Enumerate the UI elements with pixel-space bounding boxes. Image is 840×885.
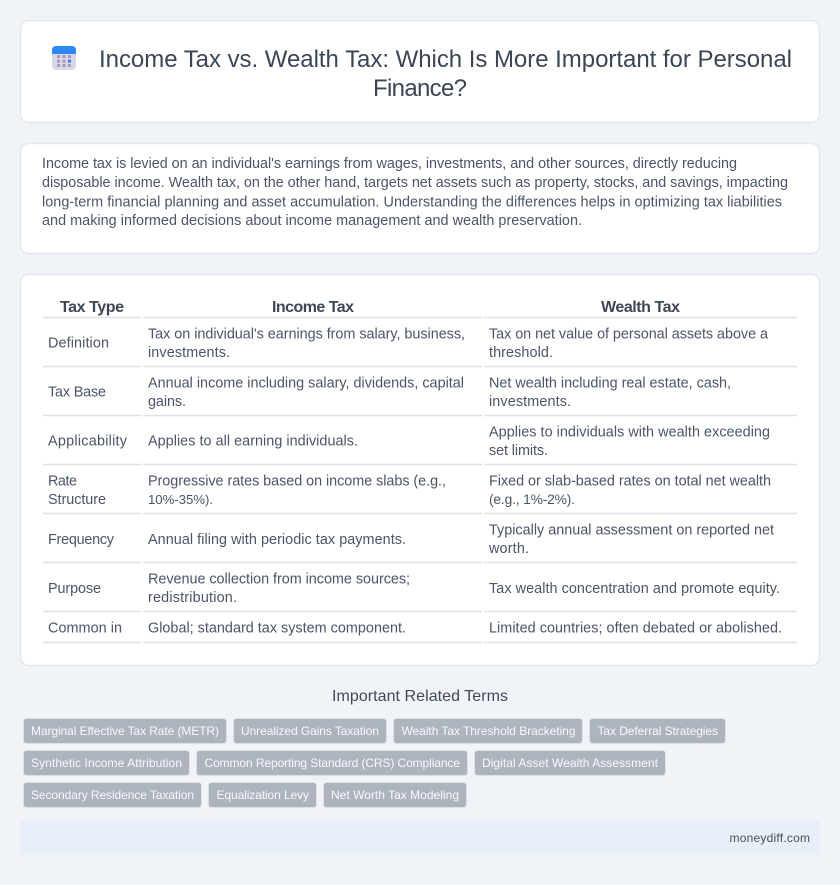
tag xyxy=(234,718,386,744)
title: Finance? xyxy=(373,75,467,102)
table row: purpose: redistribution. xyxy=(148,590,237,606)
table row: frequency: worth. xyxy=(488,541,529,557)
table row: applicability: Applies to individuals with wealth exceeding xyxy=(489,424,770,440)
tag: Synthetic Income Attribution xyxy=(31,756,182,770)
table row: rate structure: 10%-35%). xyxy=(148,492,213,507)
text block: description: long-term financial planning and asset accumulation. Understanding the differences helps in optimizing tax liabilities xyxy=(42,194,782,210)
text block: description: and making informed decisions about income management and wealth preservation. xyxy=(42,213,582,229)
tag xyxy=(24,782,202,808)
panel: comparison table card xyxy=(20,274,820,666)
tag xyxy=(24,750,190,776)
text block: description: disposable income. Wealth tax, on the other hand, targets net assets such as property, stocks, and savings, impacting xyxy=(42,175,788,191)
tag xyxy=(24,718,226,744)
tag: Marginal Effective Tax Rate (METR) xyxy=(31,724,219,738)
table row: definition: investments. xyxy=(148,345,230,361)
footer bar xyxy=(20,821,820,855)
title: Income Tax vs. Wealth Tax: Which Is More Important for Personal xyxy=(99,46,792,73)
tag xyxy=(196,750,468,776)
tag: Secondary Residence Taxation xyxy=(31,788,194,802)
table row: rate structure: Fixed or slab-based rates on total net wealth xyxy=(489,474,771,490)
panel: header card xyxy=(20,20,820,122)
title xyxy=(99,46,792,102)
tag: Unrealized Gains Taxation xyxy=(241,724,379,738)
table row: definition: threshold. xyxy=(489,345,553,361)
table row: common in: Limited countries; often debated or abolished. xyxy=(489,620,782,636)
table row: frequency xyxy=(43,522,797,562)
table row: definition: Tax on individual's earnings from salary, business, xyxy=(148,326,465,342)
table row: tax base: gains. xyxy=(148,394,186,410)
tag: Wealth Tax Threshold Bracketing xyxy=(402,724,576,738)
tag: Common Reporting Standard (CRS) Compliance xyxy=(204,756,460,770)
table row: applicability xyxy=(43,424,797,464)
tag xyxy=(324,782,466,808)
table row: tax base: Tax Base xyxy=(48,384,106,400)
table row: purpose: Purpose xyxy=(48,581,101,597)
tag xyxy=(208,782,316,808)
table row: common in: Common in xyxy=(48,620,122,636)
table header xyxy=(43,299,797,318)
text block: description: Income tax is levied on an individual's earnings from wages, investments, and other sources, directly reducing xyxy=(42,156,737,172)
table row: common in xyxy=(43,620,797,642)
table row: tax base xyxy=(43,376,797,416)
tag xyxy=(590,718,726,744)
table header: Tax Type xyxy=(60,299,124,316)
tag: Equalization Levy xyxy=(216,788,309,802)
table row: tax base: investments. xyxy=(489,394,571,410)
table row: applicability: Applies to all earning individuals. xyxy=(148,434,358,450)
table row: rate structure: Progressive rates based on income slabs (e.g., xyxy=(148,474,446,490)
table row: tax base: Annual income including salary, dividends, capital xyxy=(148,376,464,392)
table row: definition: Tax on net value of personal assets above a xyxy=(489,326,768,342)
icon: calendar xyxy=(52,46,76,70)
table header: Income Tax xyxy=(272,299,354,316)
table row: rate structure: (e.g., 1%-2%). xyxy=(489,492,575,507)
table row: frequency: Annual filing with periodic tax payments. xyxy=(148,532,406,548)
footer source text: moneydiff.com xyxy=(730,831,810,845)
table row: tax base: Net wealth including real estate, cash, xyxy=(489,376,731,392)
table row: purpose: Tax wealth concentration and promote equity. xyxy=(489,581,780,597)
tag: Digital Asset Wealth Assessment xyxy=(482,756,659,770)
panel: description card xyxy=(20,144,820,254)
table row: frequency: Typically annual assessment on reported net xyxy=(489,522,774,538)
table row: common in: Global; standard tax system component. xyxy=(148,620,406,636)
tag: Net Worth Tax Modeling xyxy=(331,788,459,802)
table row: purpose xyxy=(43,572,797,612)
tag list: related terms xyxy=(24,718,726,808)
table row: rate structure: Rate xyxy=(48,474,77,490)
table row: purpose: Revenue collection from income sources; xyxy=(148,572,410,588)
table header: Wealth Tax xyxy=(601,299,680,316)
table row: rate structure xyxy=(43,474,797,514)
table row: applicability: set limits. xyxy=(489,443,548,459)
table row: rate structure: Structure xyxy=(48,492,106,508)
tag xyxy=(394,718,582,744)
table row: definition xyxy=(43,326,797,366)
tag: Tax Deferral Strategies xyxy=(598,724,718,738)
tag xyxy=(474,750,666,776)
table row: applicability: Applicability xyxy=(48,434,128,450)
heading: important related terms: Important Related Terms xyxy=(332,688,508,705)
table row: frequency: Frequency xyxy=(48,532,115,548)
text block: description xyxy=(42,156,788,229)
table row: definition: Definition xyxy=(48,336,109,352)
